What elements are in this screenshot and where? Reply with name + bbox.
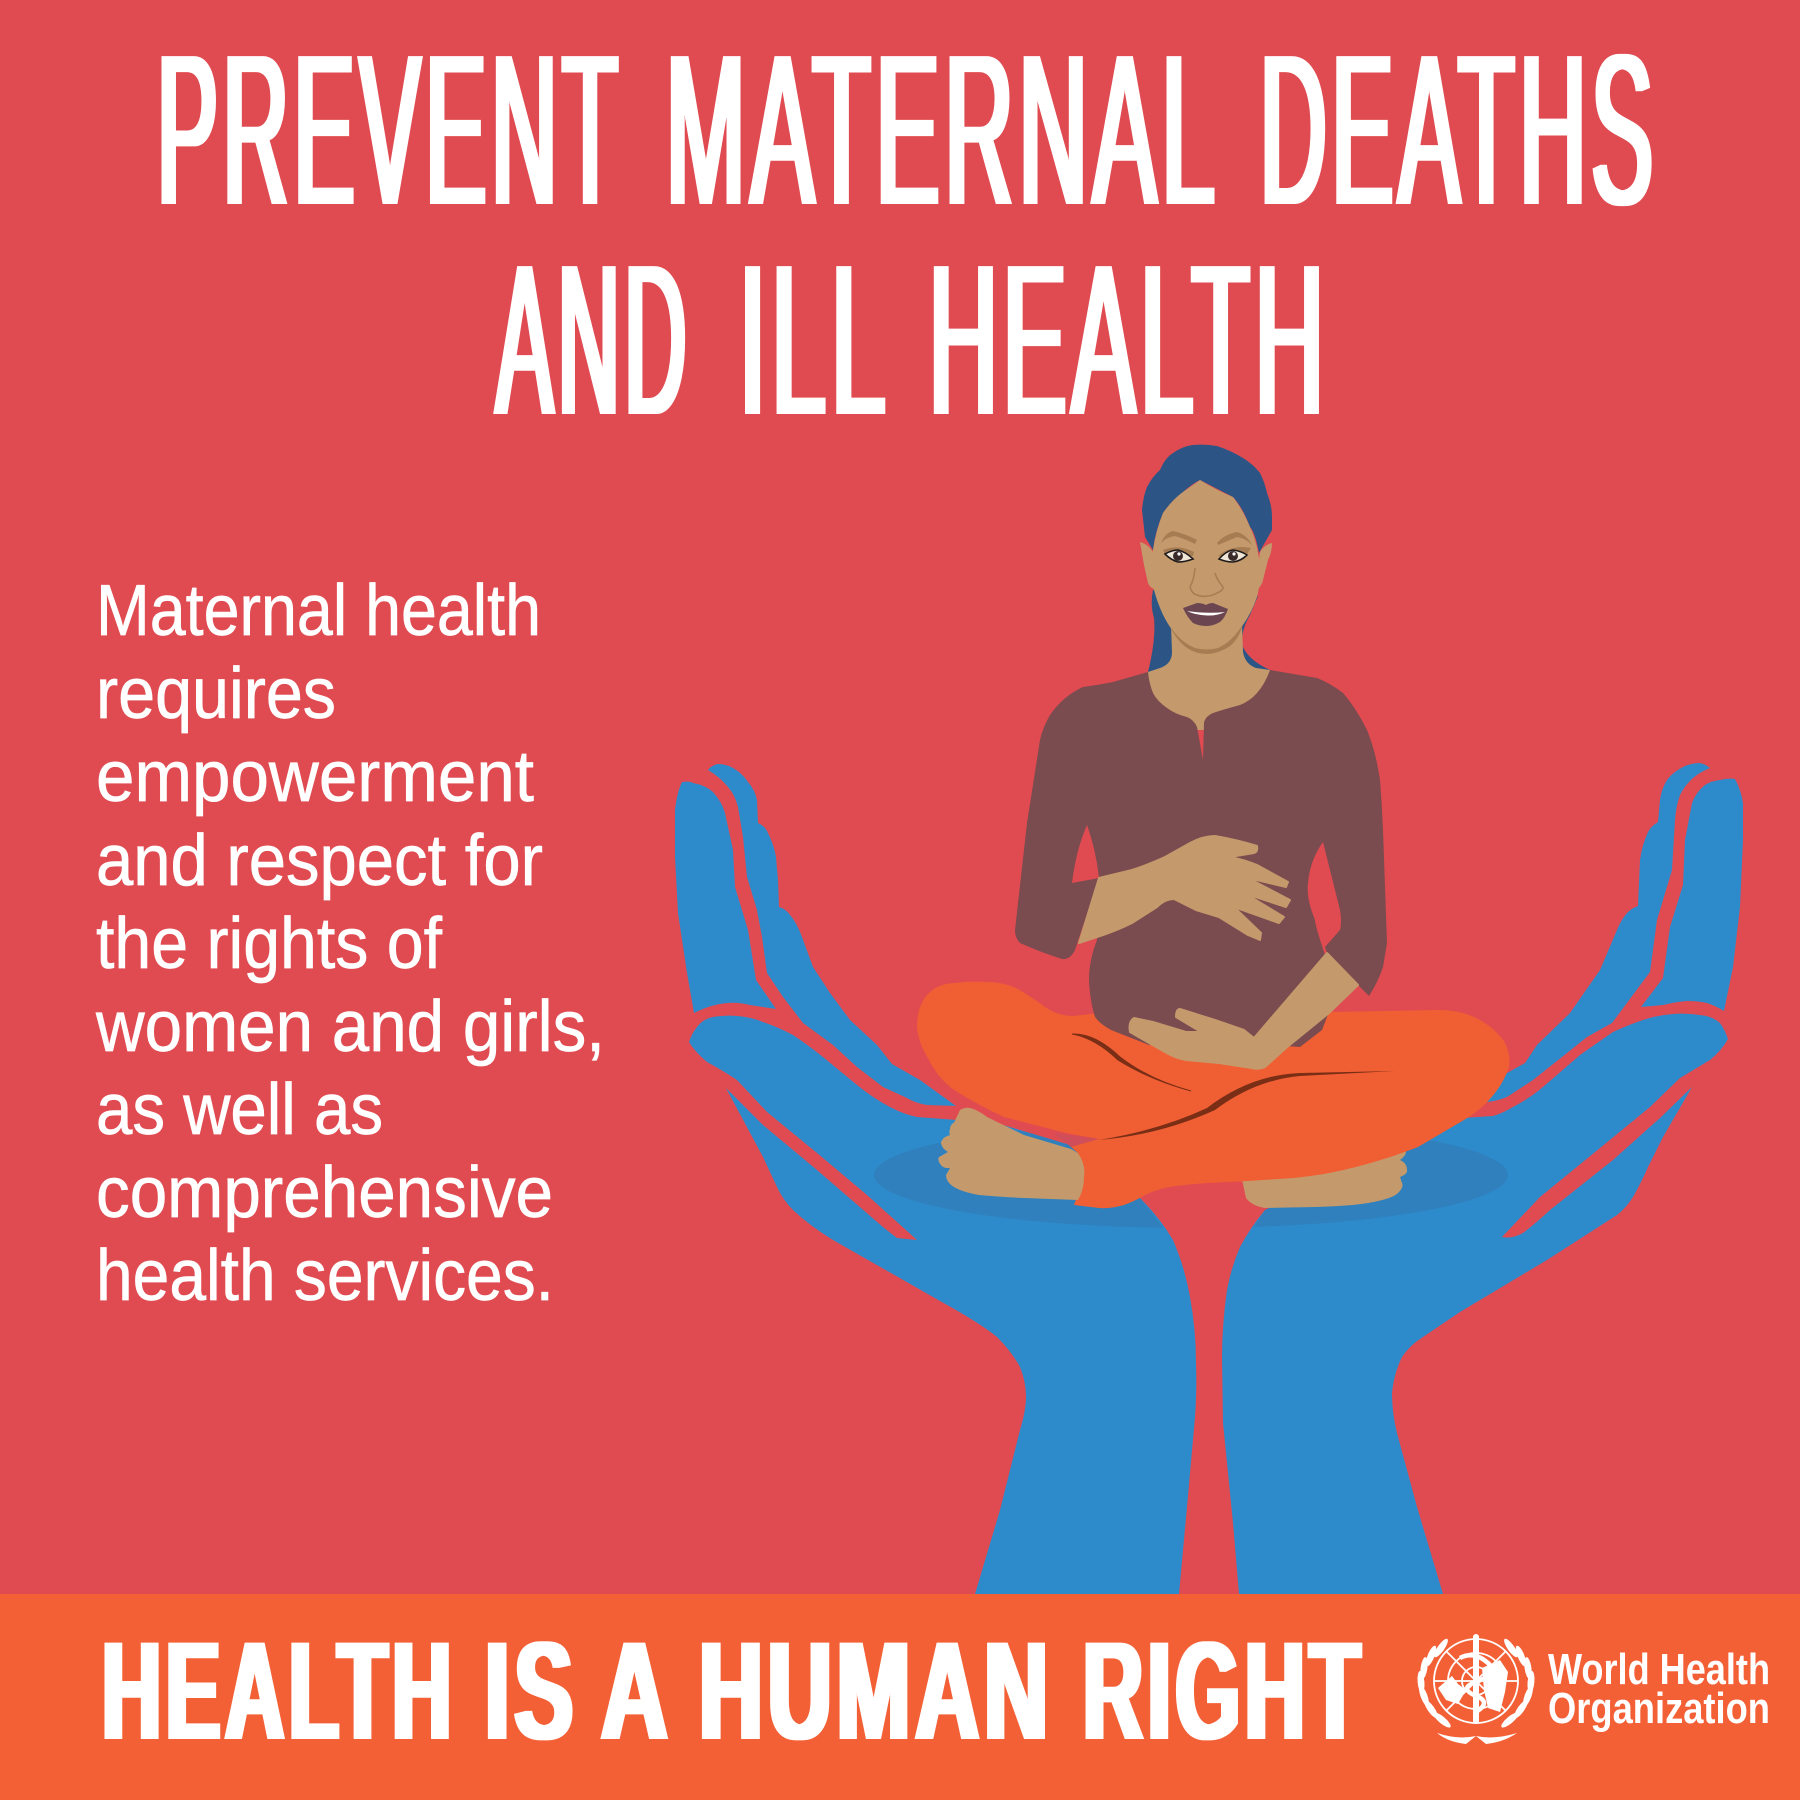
footer slogan: HEALTH bbox=[102, 1612, 456, 1769]
face bbox=[1153, 480, 1260, 653]
eyes bbox=[1165, 550, 1247, 562]
hair behind neck bbox=[1148, 590, 1270, 672]
body text: and respect for bbox=[96, 821, 543, 901]
back hand bbox=[1286, 1010, 1331, 1048]
pants bbox=[917, 982, 1510, 1208]
footer slogan: A bbox=[601, 1612, 673, 1769]
body text: Maternal health bbox=[96, 571, 541, 651]
shirt under lower arm bbox=[1286, 1012, 1329, 1047]
eyebrows bbox=[1161, 531, 1252, 545]
pants fold lines bbox=[1072, 1034, 1191, 1091]
left hand bbox=[675, 764, 1196, 1594]
title bbox=[157, 9, 1658, 460]
right foot bbox=[1240, 1140, 1407, 1208]
body text: requires bbox=[96, 654, 336, 734]
hair top bbox=[1142, 445, 1272, 553]
eye shadow bbox=[1163, 547, 1251, 556]
body text: health services. bbox=[96, 1236, 554, 1316]
footer slogan: HUMAN bbox=[699, 1612, 1053, 1769]
nose bbox=[1190, 568, 1223, 596]
continents bbox=[1438, 1660, 1508, 1712]
body text: comprehensive bbox=[96, 1153, 553, 1233]
upper arm and hand bbox=[1079, 836, 1290, 943]
footer band bbox=[0, 1594, 1800, 1800]
title: AND bbox=[496, 219, 691, 460]
body text: as well as bbox=[96, 1070, 383, 1150]
footer slogan: IS bbox=[485, 1612, 578, 1769]
shade between leg and foot bbox=[1053, 1133, 1099, 1147]
shirt bbox=[1015, 670, 1387, 1045]
title: PREVENT bbox=[157, 9, 623, 250]
lips bbox=[1183, 603, 1228, 626]
neck bbox=[1148, 625, 1270, 730]
body text bbox=[95, 571, 605, 1316]
head bbox=[1140, 445, 1272, 654]
body text: women and girls, bbox=[95, 987, 605, 1067]
wreath right bbox=[1476, 1637, 1535, 1744]
jaw line bbox=[1170, 624, 1243, 654]
title: ILL bbox=[739, 219, 891, 460]
footer slogan bbox=[102, 1612, 1365, 1769]
teeth bbox=[1187, 611, 1225, 616]
woman: pregnant figure seated bbox=[917, 445, 1510, 1208]
ears bbox=[1140, 542, 1272, 592]
staff bbox=[1473, 1634, 1479, 1724]
globe bbox=[1434, 1639, 1518, 1723]
shadow under figure bbox=[874, 1122, 1508, 1228]
left foot bbox=[938, 1108, 1084, 1200]
right hand bbox=[1222, 763, 1743, 1594]
body text: the rights of bbox=[96, 904, 443, 984]
body text: empowerment bbox=[96, 737, 534, 817]
footer slogan: RIGHT bbox=[1083, 1612, 1365, 1769]
lower arm and hand bbox=[1130, 953, 1358, 1069]
WHO name bbox=[1548, 1645, 1770, 1733]
snake bbox=[1460, 1655, 1491, 1712]
WHO logo emblem bbox=[1417, 1634, 1535, 1744]
wreath left bbox=[1417, 1637, 1476, 1744]
